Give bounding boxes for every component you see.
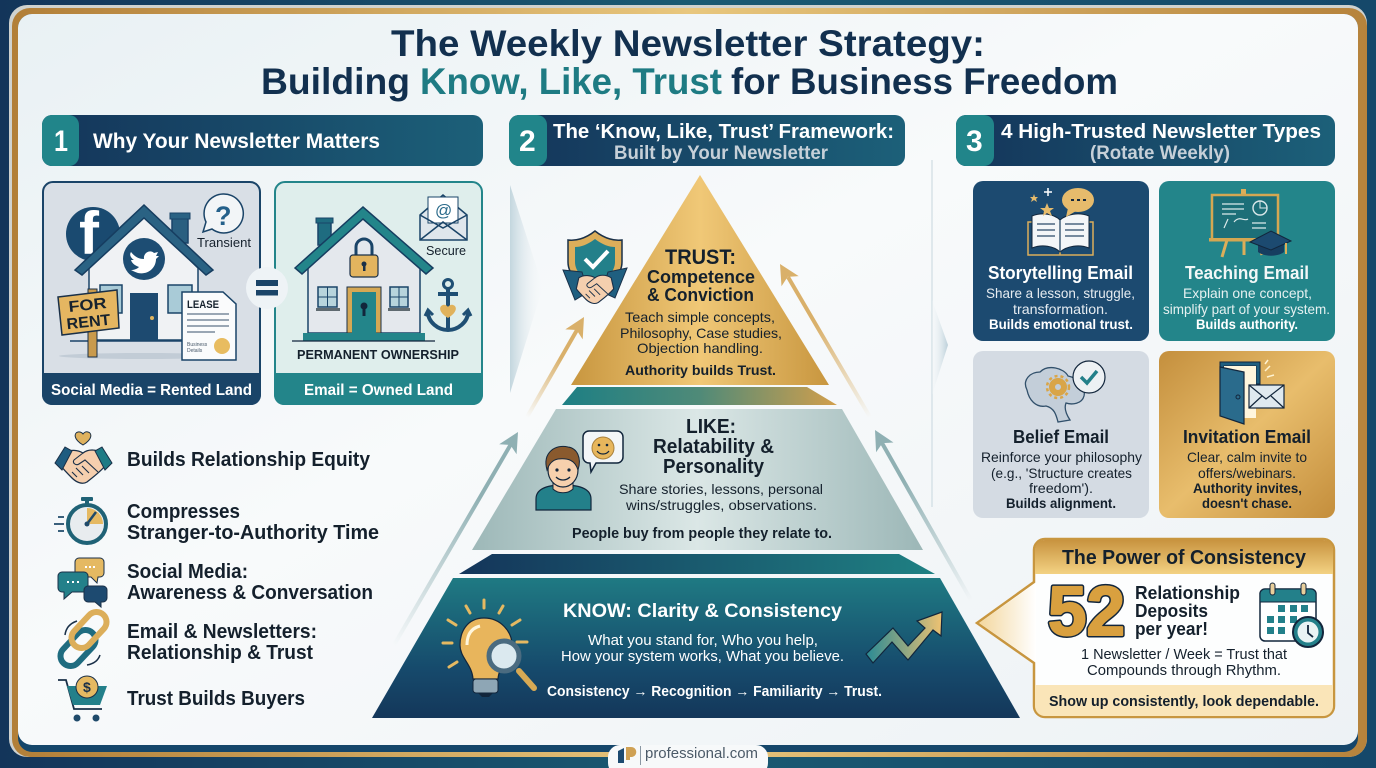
icon: rented house (59, 205, 229, 359)
stat: 52: 52 (1048, 572, 1125, 650)
item: email and newsletters: Relationship & Trust (127, 642, 313, 664)
title: Building (261, 61, 410, 102)
card: teaching email: Explain one concept, (1183, 285, 1312, 301)
icon: lease document: Business (187, 342, 208, 348)
item: relationship equity: Builds Relationship Equity (127, 449, 371, 471)
pyramid tier: trust: Philosophy, Case studies, (620, 325, 782, 341)
card: storytelling email (973, 181, 1149, 341)
footer badge: professional.com (608, 745, 768, 768)
section 1 header: 1 (54, 125, 68, 158)
callout: power of consistency: The Power of Consistency (1062, 547, 1307, 569)
card: belief email: (e.g., 'Structure creates (991, 465, 1132, 481)
item: social media: Social Media: (127, 561, 248, 583)
pyramid tier: know (372, 578, 1020, 718)
icon: for rent sign: FOR (68, 295, 107, 316)
card: invitation email: offers/webinars. (1198, 465, 1296, 481)
pyramid tier: trust: TRUST: (665, 246, 736, 269)
icon: anchor with heart (425, 280, 471, 330)
card: invitation email: doesn't chase. (1202, 495, 1292, 511)
card: belief email: Belief Email (1013, 427, 1109, 447)
item: compresses time: Compresses (127, 501, 240, 523)
card: storytelling email: Storytelling Email (988, 263, 1133, 283)
item: trust builds buyers: Trust Builds Buyers (127, 688, 305, 710)
callout: power of consistency (977, 539, 1334, 717)
item: trust builds buyers (58, 676, 305, 722)
callout: power of consistency: Relationship (1135, 583, 1240, 603)
item: compresses time: Stranger-to-Authority Time (127, 522, 379, 544)
caption: owned land: Email = Owned Land (304, 382, 453, 399)
card: storytelling email: Share a lesson, struggle, (986, 285, 1135, 301)
icon: open door with envelope (1220, 360, 1284, 424)
card: belief email: Builds alignment. (1006, 495, 1116, 511)
card: teaching email: simplify part of your system. (1163, 301, 1330, 317)
callout: power of consistency: Compounds through Rhythm. (1087, 663, 1281, 679)
pyramid band: like to know (459, 554, 935, 574)
caption: rented land: Social Media = Rented Land (51, 382, 252, 399)
title: The Weekly Newsletter Strategy: (391, 23, 985, 64)
title: Know, Like, Trust (420, 61, 722, 102)
pyramid band: trust to like (562, 387, 837, 405)
chevron: section 2 to 3 (932, 160, 948, 507)
icon: brain with gear (1025, 361, 1105, 422)
icon: person with smile bubble (536, 431, 623, 510)
item: email and newsletters (56, 608, 317, 670)
pyramid tier: like: Relatability & (653, 436, 774, 458)
callout: power of consistency: per year! (1135, 619, 1208, 639)
list: why newsletter matters (54, 432, 379, 722)
section 2 header: Built by Your Newsletter (614, 142, 828, 164)
icon: envelope: @ (435, 201, 452, 220)
pyramid tier: know: Consistency → Recognition → Familiarity → Trust. (547, 684, 882, 700)
stat: 52: 52 (1048, 572, 1125, 650)
card: storytelling email: transformation. (1013, 301, 1108, 317)
title: for Business Freedom (731, 61, 1118, 102)
label: transient: Transient (197, 236, 252, 250)
item: compresses time (54, 497, 379, 544)
section 3 header: (Rotate Weekly) (1090, 142, 1230, 164)
item: trust builds buyers: $ (83, 679, 91, 695)
card: invitation email: Clear, calm invite to (1187, 449, 1307, 465)
icon: lease document (182, 292, 236, 360)
item: social media (58, 558, 373, 607)
icon: envelope (420, 195, 467, 240)
icon: chalkboard with graduation cap (1209, 189, 1291, 257)
card: storytelling email: Builds emotional trust. (989, 316, 1133, 332)
pyramid tier: trust: Competence (647, 267, 755, 287)
icon: lease document: Details (187, 348, 203, 354)
label: secure: Secure (426, 244, 466, 258)
pyramid tier: like: wins/struggles, observations. (625, 497, 817, 513)
callout: power of consistency: Show up consistently, look dependable. (1049, 693, 1319, 710)
panel: rented land (42, 182, 261, 405)
pyramid tier: like: People buy from people they relate to. (572, 526, 832, 542)
card: invitation email: Authority invites, (1193, 480, 1302, 496)
icon: trend arrow (866, 612, 942, 663)
title (261, 23, 1118, 102)
pyramid tier: trust: & Conviction (647, 285, 754, 305)
icon: lease document: LEASE (187, 299, 219, 311)
icon: shield with handshake (563, 231, 627, 303)
pyramid tier: trust: Authority builds Trust. (625, 362, 776, 378)
callout: power of consistency: 1 Newsletter / Week = Trust that (1081, 647, 1287, 663)
callout: power of consistency: Deposits (1135, 601, 1208, 621)
section 3 header (956, 115, 1335, 166)
section 3 header: 4 High-Trusted Newsletter Types (1001, 121, 1321, 143)
icon: light bulb with magnifier (443, 600, 534, 697)
footer badge: professional.com: professional.com (645, 745, 758, 762)
pyramid tier: like: LIKE: (686, 416, 736, 438)
pyramid tier: know: KNOW: Clarity & Consistency (563, 600, 842, 622)
icon: facebook: f (79, 200, 100, 267)
section 2 header (509, 115, 905, 166)
pyramid tier: know: What you stand for, Who you help, (588, 633, 818, 649)
section 2 header: The ‘Know, Like, Trust’ Framework: (553, 121, 894, 143)
icon: facebook (66, 200, 120, 267)
section 2 header: 2 (519, 125, 536, 158)
arrow: like to trust right (780, 264, 870, 417)
panel: owned land (274, 182, 483, 405)
card: invitation email: Invitation Email (1183, 427, 1311, 447)
card: belief email: freedom'). (1029, 480, 1093, 496)
pyramid tier: like: Personality (663, 456, 765, 478)
icon: question bubble: ? (215, 201, 232, 231)
arrow: know to like right (875, 430, 971, 600)
icon: owned house (292, 207, 435, 341)
section 1 header: Why Your Newsletter Matters (93, 130, 380, 153)
label: permanent ownership: PERMANENT OWNERSHIP (297, 348, 459, 362)
item: social media: Awareness & Conversation (127, 582, 373, 604)
pyramid tier: trust: Objection handling. (637, 340, 763, 356)
icon: twitter (123, 238, 165, 280)
section 3 header: 3 (966, 125, 983, 158)
card: invitation email (1159, 351, 1335, 518)
icon: calendar with clock (1260, 583, 1323, 647)
card: teaching email (1159, 181, 1335, 341)
item: email and newsletters: Email & Newsletters: (127, 621, 317, 643)
chevron: section 1 to 2 (510, 185, 543, 393)
card: teaching email: Builds authority. (1196, 316, 1298, 332)
pyramid tier: know: How your system works, What you believe. (561, 649, 844, 665)
icon: for rent sign (58, 289, 119, 357)
icon: equals sign (246, 267, 288, 309)
icon: for rent sign: RENT (66, 312, 112, 333)
arrow: know to like left (394, 432, 518, 645)
pyramid tier: like (472, 409, 923, 550)
pyramid tier: like: Share stories, lessons, personal (619, 481, 823, 497)
arrow: like to trust left (527, 317, 584, 417)
section 1 header (42, 115, 483, 166)
icon: question bubble (203, 194, 243, 233)
card: belief email: Reinforce your philosophy (981, 449, 1142, 465)
card: belief email (973, 351, 1149, 518)
icon: open book (1028, 188, 1094, 255)
pyramid tier: trust (571, 175, 829, 385)
pyramid tier: trust: Teach simple concepts, (625, 309, 775, 325)
item: relationship equity (55, 432, 371, 483)
card: teaching email: Teaching Email (1185, 263, 1309, 283)
